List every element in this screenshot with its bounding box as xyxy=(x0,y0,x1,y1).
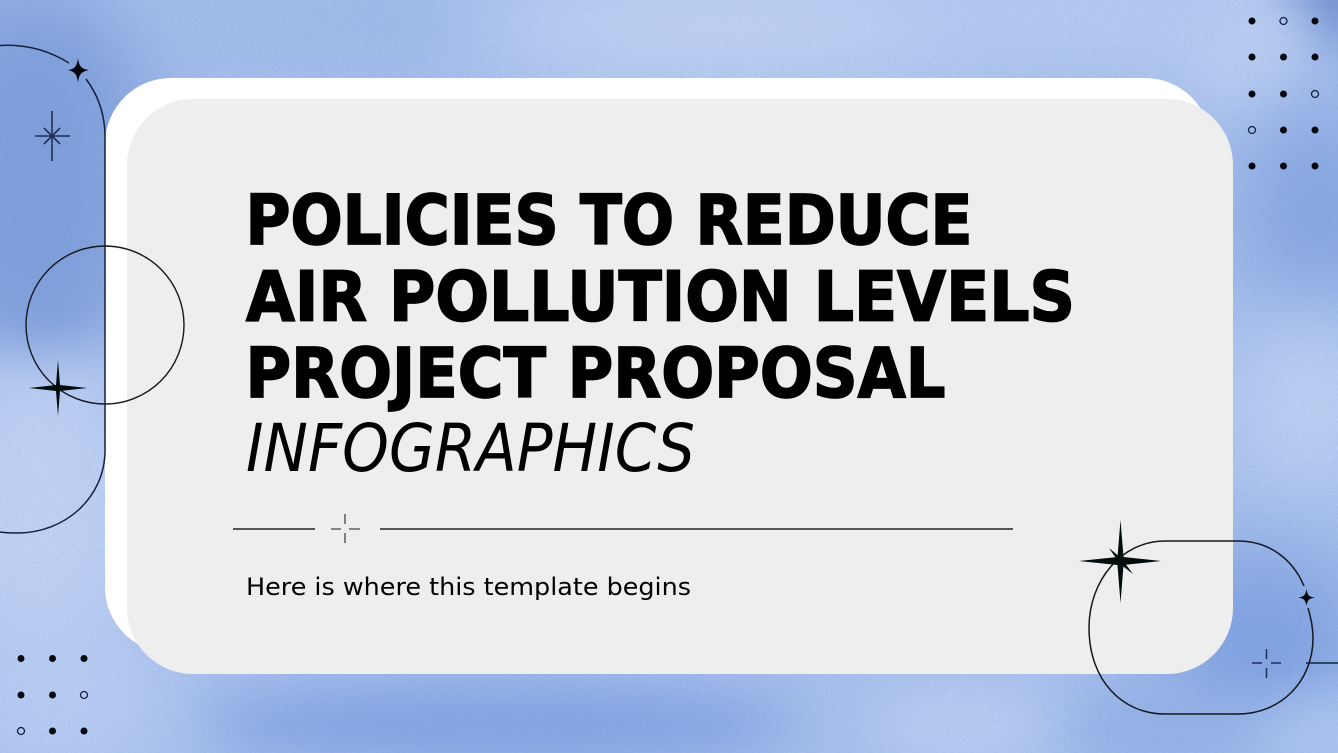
title: AIR POLLUTION LEVELS xyxy=(246,258,1075,338)
divider with crosshair xyxy=(233,514,1013,543)
connector line xyxy=(1306,662,1338,664)
title xyxy=(246,181,1075,414)
icon: small solid star xyxy=(68,58,89,83)
panel: grey front card xyxy=(127,99,1233,674)
dot grid: top right xyxy=(1248,18,1318,170)
title: PROJECT PROPOSAL xyxy=(246,334,946,414)
circle outline xyxy=(26,246,184,404)
icon: big sparkle star xyxy=(1079,520,1161,603)
left decoration: outline and stars xyxy=(0,45,184,533)
icon: small solid star xyxy=(1298,589,1315,606)
subtitle: infographics: INFOGRAPHICS xyxy=(246,410,695,487)
panel: white back card xyxy=(105,78,1211,653)
title: POLICIES TO REDUCE xyxy=(246,181,972,261)
icon: thin asterisk star xyxy=(35,111,70,161)
icon: crosshair xyxy=(1252,649,1281,678)
tagline: Here is where this template begins xyxy=(246,573,691,601)
right decoration: outline and stars xyxy=(1079,520,1338,714)
icon: long sparkle star xyxy=(29,360,87,416)
dot grid: bottom left xyxy=(18,655,88,734)
